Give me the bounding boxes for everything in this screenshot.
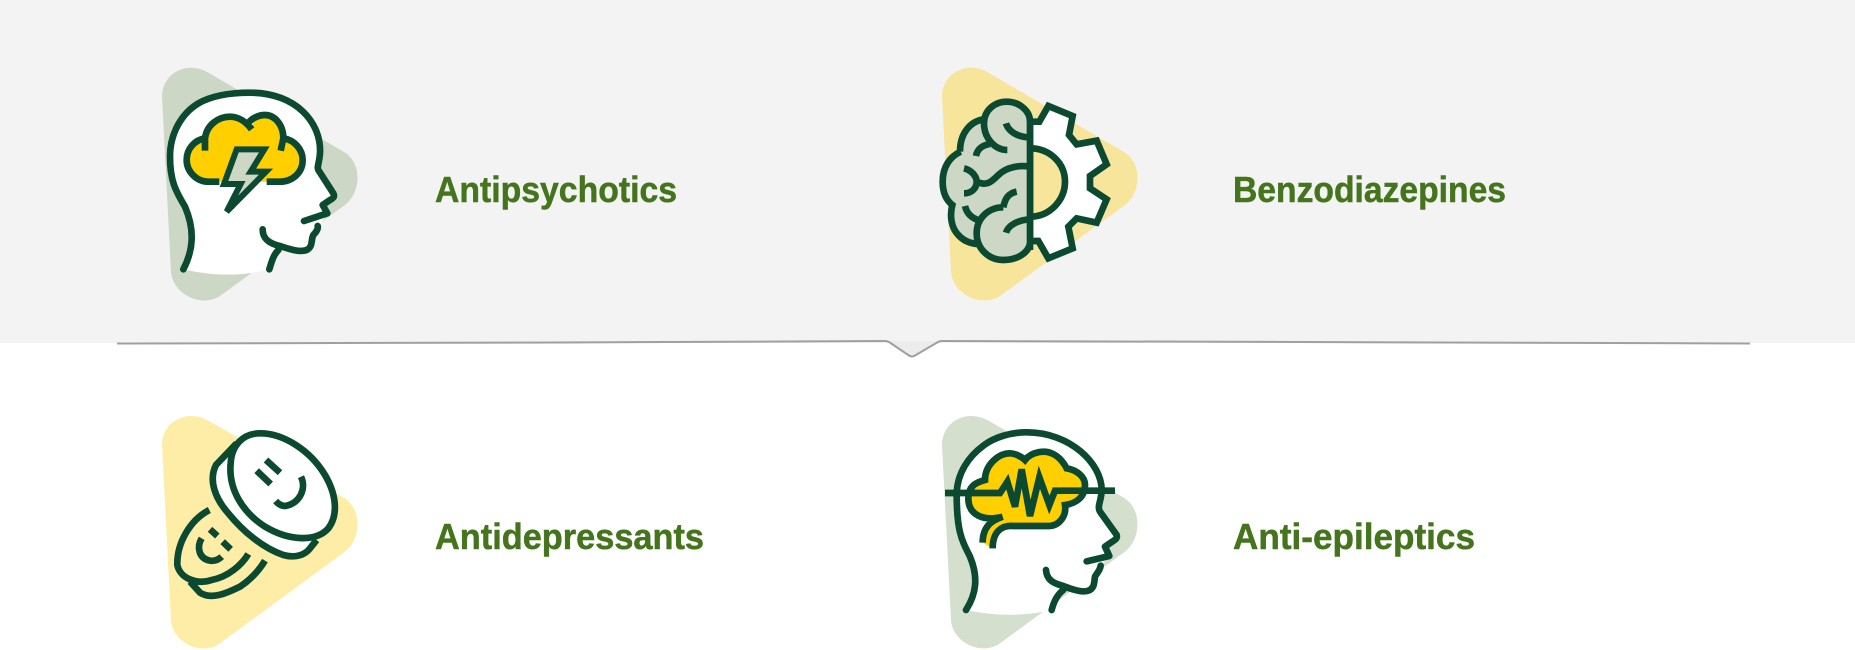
icon: smiling pills <box>162 416 357 648</box>
icon: head with storm cloud <box>162 68 357 300</box>
label: Anti-epileptics: Anti-epileptics <box>1233 516 1475 557</box>
label: Antipsychotics: Antipsychotics <box>435 169 677 210</box>
label: Benzodiazepines: Benzodiazepines <box>1233 169 1506 210</box>
label: Antidepressants: Antidepressants <box>435 516 704 557</box>
top panel background <box>0 0 1855 343</box>
divider with notch <box>117 341 1750 357</box>
icon: brain and gear <box>942 68 1137 300</box>
icon: head with brain activity <box>942 416 1137 648</box>
